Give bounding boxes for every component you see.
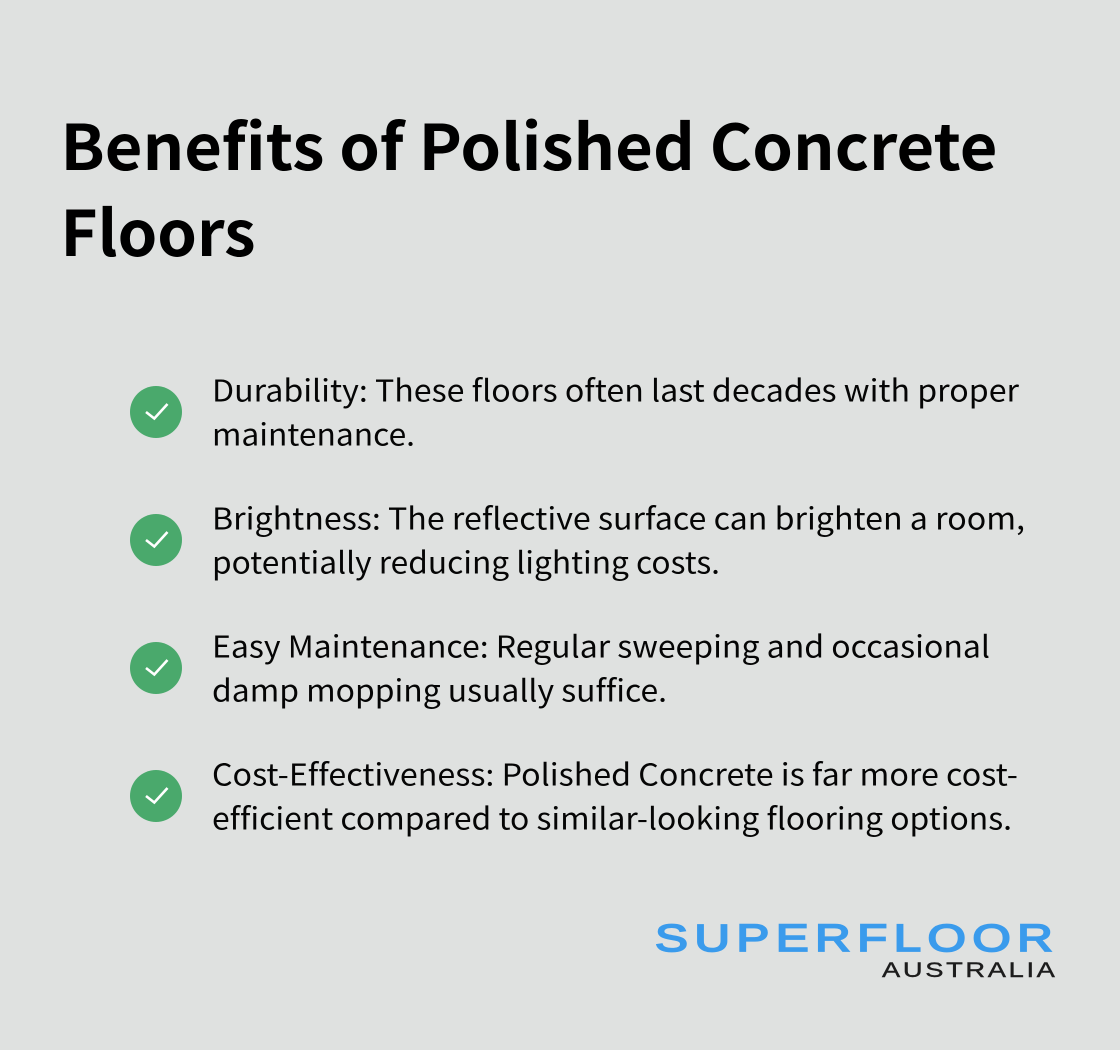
logo: Superfloor Australia: SUPERFLOOR [655,917,1053,960]
icon: check badge [130,642,182,694]
benefit: brightness [130,494,1025,582]
text: cost-effectiveness [212,750,1018,838]
text: durability [212,366,1019,454]
text: easy maintenance [212,622,990,710]
icon: check badge [130,514,182,566]
text: easy maintenance: damp mopping usually suffice. [212,666,667,710]
icon: check badge [130,770,182,822]
text: easy maintenance: Easy Maintenance: Regular sweeping and occasional [212,622,990,666]
text: brightness: Brightness: The reflective surface can brighten a room, [212,494,1025,538]
logo: Superfloor Australia [655,917,1056,982]
text: durability: maintenance. [212,410,415,454]
title [60,98,998,275]
title: Benefits of Polished Concrete [60,98,998,189]
benefit: cost-effectiveness [130,750,1018,838]
text: brightness: potentially reducing lighting costs. [212,538,720,582]
benefit: durability [130,366,1019,454]
icon: check badge [130,386,182,438]
benefit: easy maintenance [130,622,990,710]
text: cost-effectiveness: efficient compared to similar-looking flooring options. [212,794,1012,838]
text: durability: Durability: These floors often last decades with proper [212,366,1019,410]
logo: Superfloor Australia: AUSTRALIA [882,959,1056,982]
text: brightness [212,494,1025,582]
title: Floors [60,184,256,275]
text: cost-effectiveness: Cost-Effectiveness: Polished Concrete is far more cost- [212,750,1018,794]
